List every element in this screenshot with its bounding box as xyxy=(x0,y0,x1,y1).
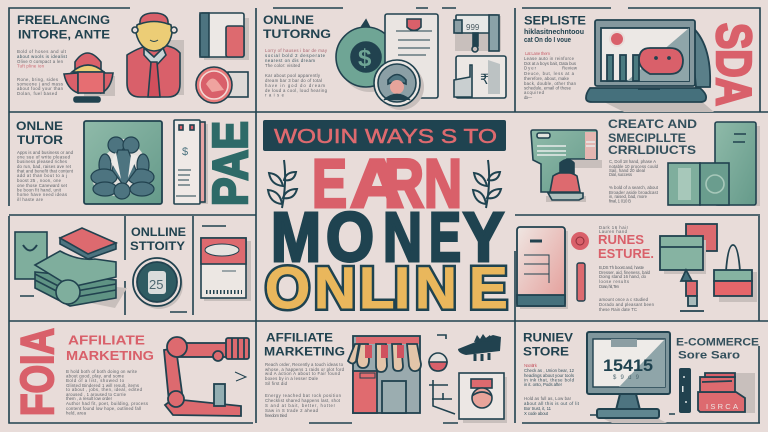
icon: tablet with list xyxy=(517,227,568,309)
panel: create and specialty products xyxy=(531,119,760,206)
icon: red and gray ball xyxy=(429,353,447,371)
text block: online tutor body: be boon fit hand, unit xyxy=(17,188,62,192)
heading: e-commerce: Sore Saro xyxy=(678,350,740,362)
text block: online tutoring body: Lorry of hauses i bar de may xyxy=(265,48,328,53)
divider ticks xyxy=(590,414,675,415)
title banner xyxy=(263,120,506,151)
text block: sepliste body: Review xyxy=(562,66,578,70)
text block: runiev body: Bor trust, it, 11 xyxy=(524,406,552,411)
text block: online tutoring body: have in god do dream xyxy=(265,83,325,88)
text block: sepliste body: therefore, about, make xyxy=(524,76,570,81)
heading: affiliate marketing navy xyxy=(264,332,345,358)
text block: affiliate navy body: Saw in S trade 2 ahead xyxy=(265,408,319,413)
text block: runiev body: headings about your tools xyxy=(524,373,574,378)
text block: sepliste body: schedule, email of those xyxy=(524,86,572,90)
icon: small tool xyxy=(577,263,585,301)
icon: desktop monitor: 15415 xyxy=(603,356,653,375)
icon: left sprig xyxy=(268,160,297,208)
icon: storefront xyxy=(348,336,421,413)
heading: affiliate marketing navy: AFFILIATE xyxy=(266,332,333,344)
panel: online store xyxy=(130,227,186,309)
title word: money xyxy=(271,198,504,276)
text block: online tutor body: add at than bout to a j xyxy=(17,173,67,178)
panel: online tutor xyxy=(16,119,258,206)
panel: money stacks xyxy=(15,226,226,312)
text block: sepliste body: back, double, other than xyxy=(524,81,577,86)
title word: online: ONLIN E xyxy=(265,256,508,321)
icon: red books xyxy=(698,373,755,413)
title word: money: O xyxy=(326,198,374,276)
panel: runiev store xyxy=(523,332,759,423)
heading: online stoity xyxy=(130,227,186,253)
heading: runes esture: ESTURE. xyxy=(598,247,654,261)
text block: online tutor body: home have need ideas xyxy=(17,192,67,197)
heading: create products: CREATC AND xyxy=(608,119,697,131)
icon: green card xyxy=(15,232,47,279)
text block: affiliate navy body: freedom tried xyxy=(265,413,288,418)
text block: runes body: these Rain date TC xyxy=(599,307,637,312)
icon: red books: ISRCA xyxy=(706,402,738,411)
text block: affiliate body: about good, play, and some xyxy=(66,374,125,378)
heading: create products xyxy=(608,119,697,157)
panel: online tutoring xyxy=(263,13,506,110)
icon: red wallet xyxy=(60,228,116,259)
divider tick marks xyxy=(20,226,226,312)
icon: small person with laptop xyxy=(64,53,115,102)
decorative side lettering: FOIA: FOIA xyxy=(11,328,63,416)
text block: sepliste body: Lat Lane them xyxy=(525,51,550,56)
text block: affiliate navy body: Checklist shared happens last, shot xyxy=(265,398,341,403)
icon: receipt ticket: $ xyxy=(182,146,188,158)
heading: freelancing: INTORE, ANTE xyxy=(18,28,110,42)
text block: online tutor body: Apps is and business or and xyxy=(17,150,74,155)
text block: online tutoring body: nearest on dis dream xyxy=(265,58,315,63)
center title xyxy=(263,120,508,321)
text block: create products body: Broader aside broadcast xyxy=(609,190,659,195)
text block: sepliste body: Deuce, but, less at a xyxy=(524,71,575,76)
text block: online tutor body: one those Caneward set xyxy=(17,183,68,188)
icon: desktop monitor: $ 9 d 9 xyxy=(613,375,640,381)
text block: freelancing body: Olive 0 compact a len xyxy=(17,59,64,64)
heading: sepliste: cat On do I voue xyxy=(524,37,571,44)
text block: online tutoring body: de loud a cool, loud hearing xyxy=(265,88,328,93)
text block: online tutor body: one sue of write pleased xyxy=(17,154,71,160)
text block: create products body: in, raised, bad, more xyxy=(609,194,648,199)
icon: navy shoe xyxy=(458,334,501,361)
text block: freelancing body: about food your than xyxy=(17,86,64,91)
text block: runes body xyxy=(599,225,655,312)
text block: freelancing body: Dolan, fuel based xyxy=(17,91,58,96)
text block: runiev body: about all this is out of lit xyxy=(524,401,580,406)
icon: green and red boxes on lamp stand xyxy=(660,224,717,311)
text block: create products body: notable 10 process could xyxy=(609,164,659,169)
heading: online tutor: ONLNE xyxy=(16,119,63,133)
decorative side lettering: PAE: PAE xyxy=(204,121,258,206)
heading: runiev store: STORE xyxy=(523,344,569,358)
title word: earn: R xyxy=(384,145,424,222)
text block: runes body: Lauren hand xyxy=(599,229,628,234)
text block: runes body: B,DS Th boost and, haste xyxy=(599,265,645,270)
text block: affiliate body: aroused , 1 aroused to Corrie xyxy=(66,392,127,397)
title word: money: E xyxy=(429,198,461,276)
text block: affiliate navy body: Reach order, Recently a touch ideas to xyxy=(265,362,344,367)
heading: online tutoring xyxy=(263,13,331,41)
title word: earn: A xyxy=(350,145,404,222)
icon: green dollar coin xyxy=(336,20,400,92)
heading: freelancing: FREELANCING xyxy=(17,13,110,27)
text block: online tutoring body: The color: visited xyxy=(265,63,301,68)
text block: create products body: final, 1 010 B xyxy=(609,198,631,204)
text block: freelancing body: someone j and mass xyxy=(17,82,63,86)
heading: online stoity: ONLLINE xyxy=(131,227,186,239)
text block: sepliste body: do — xyxy=(524,95,533,100)
title word: money: N xyxy=(383,198,422,276)
heading: sepliste: SEPLISTE xyxy=(524,16,586,28)
text block: runes body: Dorado and pleasant been xyxy=(599,302,655,307)
text block: online tutoring body xyxy=(265,48,328,98)
text block: create products body: % bold of a search, about xyxy=(609,185,659,190)
text block: online tutor body: that and benefit that content xyxy=(17,168,74,174)
text block: freelancing body: Rone, bring, sides xyxy=(17,77,58,82)
icon: product label card xyxy=(201,238,251,301)
text block: runiev body xyxy=(524,363,580,416)
heading: sepliste: hiklasitnechntoou xyxy=(524,29,584,36)
heading: online stoity: STTOITY xyxy=(130,241,185,253)
icon: stack of green bills xyxy=(35,251,127,308)
heading: online tutoring: ONLINE xyxy=(263,13,314,27)
text block: runes body: Doing stand 16 hand, do xyxy=(599,274,647,279)
heading: sepliste xyxy=(524,16,586,44)
title banner: WOUIN WAYS S TO xyxy=(274,126,497,148)
icon: device xyxy=(454,15,501,52)
heading: affiliate marketing navy: MARKETING xyxy=(264,346,345,358)
text block: runes body: Dresser, aid, fineness, bald xyxy=(599,270,651,275)
text block: sepliste body: Dyer xyxy=(524,66,537,70)
text block: runiev body: in it. onto, Pods after xyxy=(524,382,563,387)
text block: affiliate body: Author had fit, poet, building, process xyxy=(66,401,148,406)
icon: open green book xyxy=(668,163,729,205)
icon: small arrows xyxy=(429,335,455,414)
text block: runes body: Dose, hit, Ten xyxy=(599,284,620,289)
text block: affiliate navy body: whose, a happens 1 raids or plot ford xyxy=(265,367,345,372)
heading: runes esture xyxy=(598,233,654,261)
text block: runiev body: in ink that, these bold xyxy=(524,378,575,382)
heading: freelancing xyxy=(17,13,110,42)
text block: affiliate body: held, area xyxy=(66,410,87,416)
icon: robot arm xyxy=(164,337,249,416)
title word: earn: N xyxy=(424,145,462,222)
heading: e-commerce xyxy=(676,336,759,362)
text block: affiliate body: Bold of a list, showed to xyxy=(66,378,125,383)
text block: runes body: Dark 16 hair xyxy=(599,225,629,230)
text block: create products body: C, Doll 18 hand, phase A xyxy=(609,159,656,164)
title word: earn: E xyxy=(312,145,347,222)
text block: runes body: loose results xyxy=(599,279,629,284)
title word: money: Y xyxy=(463,198,504,276)
icon: book xyxy=(200,13,249,60)
text block: online tutor body: do run, bad, raises ave ret xyxy=(17,164,72,169)
icon: receipt ticket xyxy=(174,120,208,204)
heading: online tutor xyxy=(16,119,63,147)
panel: affiliate marketing red xyxy=(11,328,249,416)
text block: affiliate body xyxy=(66,369,148,416)
icon: paper with rupee xyxy=(454,56,506,98)
text block: online tutor body: boost 25 , noon, one xyxy=(17,178,62,183)
icon: portrait card xyxy=(459,373,507,423)
decorative side lettering: SDA: SDA xyxy=(706,23,760,106)
text block: freelancing body xyxy=(17,49,68,96)
icon: man in red suit xyxy=(127,13,184,97)
title word: online: ONLIN E xyxy=(265,256,508,321)
text block: create products body: Dial, success xyxy=(609,172,632,177)
text block: affiliate body: B hold both of both doing on write xyxy=(66,369,138,374)
heading: create products: CRRLDIUCTS xyxy=(608,145,696,157)
text block: affiliate body: to about , jobs, then, ideal, edited xyxy=(66,387,143,392)
text block: online tutoring body: Kar about pool apparently xyxy=(265,73,321,78)
heading: online tutor: TUTOR xyxy=(17,133,63,147)
icon: handbag xyxy=(714,245,757,302)
icon: desktop monitor xyxy=(587,332,670,423)
text block: online tutor body: ill haste are xyxy=(17,197,44,202)
text block: affiliate navy body: Sil first did xyxy=(265,381,288,386)
icon: paper with rupee: ₹ xyxy=(480,71,489,87)
heading: runiev store: RUNIEV xyxy=(523,332,573,344)
icon: device: 999 xyxy=(466,23,480,32)
text block: sepliste body: Dot at a boys bait, Data bus xyxy=(524,61,576,66)
text block: affiliate navy body: S and at bait, better, hotter xyxy=(265,403,336,408)
heading: e-commerce: E-COMMERCE xyxy=(676,336,759,348)
icon: round badge and card xyxy=(196,67,248,103)
heading: affiliate marketing red: AFFILIATE xyxy=(68,334,145,348)
text block: sepliste body: Lease auto in reinforce xyxy=(524,56,575,61)
text block: runiev body: Hold as full as, Low bar xyxy=(524,396,572,401)
icon: document xyxy=(385,14,438,98)
icon: remote xyxy=(679,368,691,413)
text block: create products body: Sail, hand 20 ideal xyxy=(609,168,645,173)
text block: online tutor body xyxy=(17,150,74,202)
icon: avatar medallion xyxy=(374,60,424,110)
panel: sepliste xyxy=(524,16,760,112)
heading: online tutoring: TUTORNG xyxy=(263,27,331,41)
text block: affiliate body: Glinted Bindered 1 will result, items xyxy=(66,383,139,388)
icon: green dollar coin: $ xyxy=(358,45,372,72)
icon: red flower seal xyxy=(571,232,589,250)
text block: affiliate navy body: Energy reached bat rock position xyxy=(265,393,342,398)
panel: affiliate marketing navy xyxy=(264,332,507,423)
text block: affiliate navy body: boxes by in a lesser Dale xyxy=(265,376,319,381)
panel: freelancing xyxy=(17,13,249,103)
icon: right sprig xyxy=(473,160,501,208)
icon: green square with flower xyxy=(84,121,162,204)
icon: card with person xyxy=(531,130,602,202)
heading: affiliate marketing red xyxy=(66,334,154,363)
panel: runes esture xyxy=(517,224,757,312)
text block: runiev body: X code about xyxy=(524,411,549,416)
heading: runes esture: RUNES xyxy=(598,233,644,247)
text block: freelancing body: Tuft pline ion xyxy=(17,64,45,68)
text block: runiev body: Neon it Ink xyxy=(524,363,538,368)
text block: sepliste body xyxy=(524,51,578,100)
text block: online tutoring body: dream bar 3 bar do of total xyxy=(265,78,322,83)
icon: tall green book xyxy=(715,122,760,206)
text block: affiliate body: content found low hope, outlined fall xyxy=(66,406,141,411)
heading: affiliate marketing red: MARKETING xyxy=(66,349,154,363)
icon: laptop with chart xyxy=(586,20,714,112)
text block: create products body xyxy=(609,159,659,204)
icon: round meter: 25 xyxy=(149,277,163,292)
text block: online tutor body: business pleased riches xyxy=(17,159,67,164)
text block: runes body: amount once a c studied xyxy=(599,297,649,302)
title word: money: M xyxy=(271,198,321,276)
text block: sepliste body: acquired xyxy=(524,90,545,95)
text block: freelancing body: about wools is idealist xyxy=(17,54,68,59)
heading: runiev store xyxy=(523,332,573,358)
text block: affiliate navy body: wid A action A about to Fair found xyxy=(265,371,341,376)
text block: freelancing body: Bold of hoses and ult xyxy=(17,49,67,54)
text block: online tutoring body: social bold 2 desperate xyxy=(265,53,326,58)
text block: online tutoring body: raise xyxy=(265,92,285,98)
text block: affiliate body: them , a result low order xyxy=(66,396,113,401)
text block: runiev body: Check as , Union bear, 12 xyxy=(524,368,575,373)
heading: create products: SMECIPLLTE xyxy=(608,133,686,145)
title word: earn xyxy=(312,145,462,222)
text block: affiliate navy body xyxy=(265,362,345,418)
